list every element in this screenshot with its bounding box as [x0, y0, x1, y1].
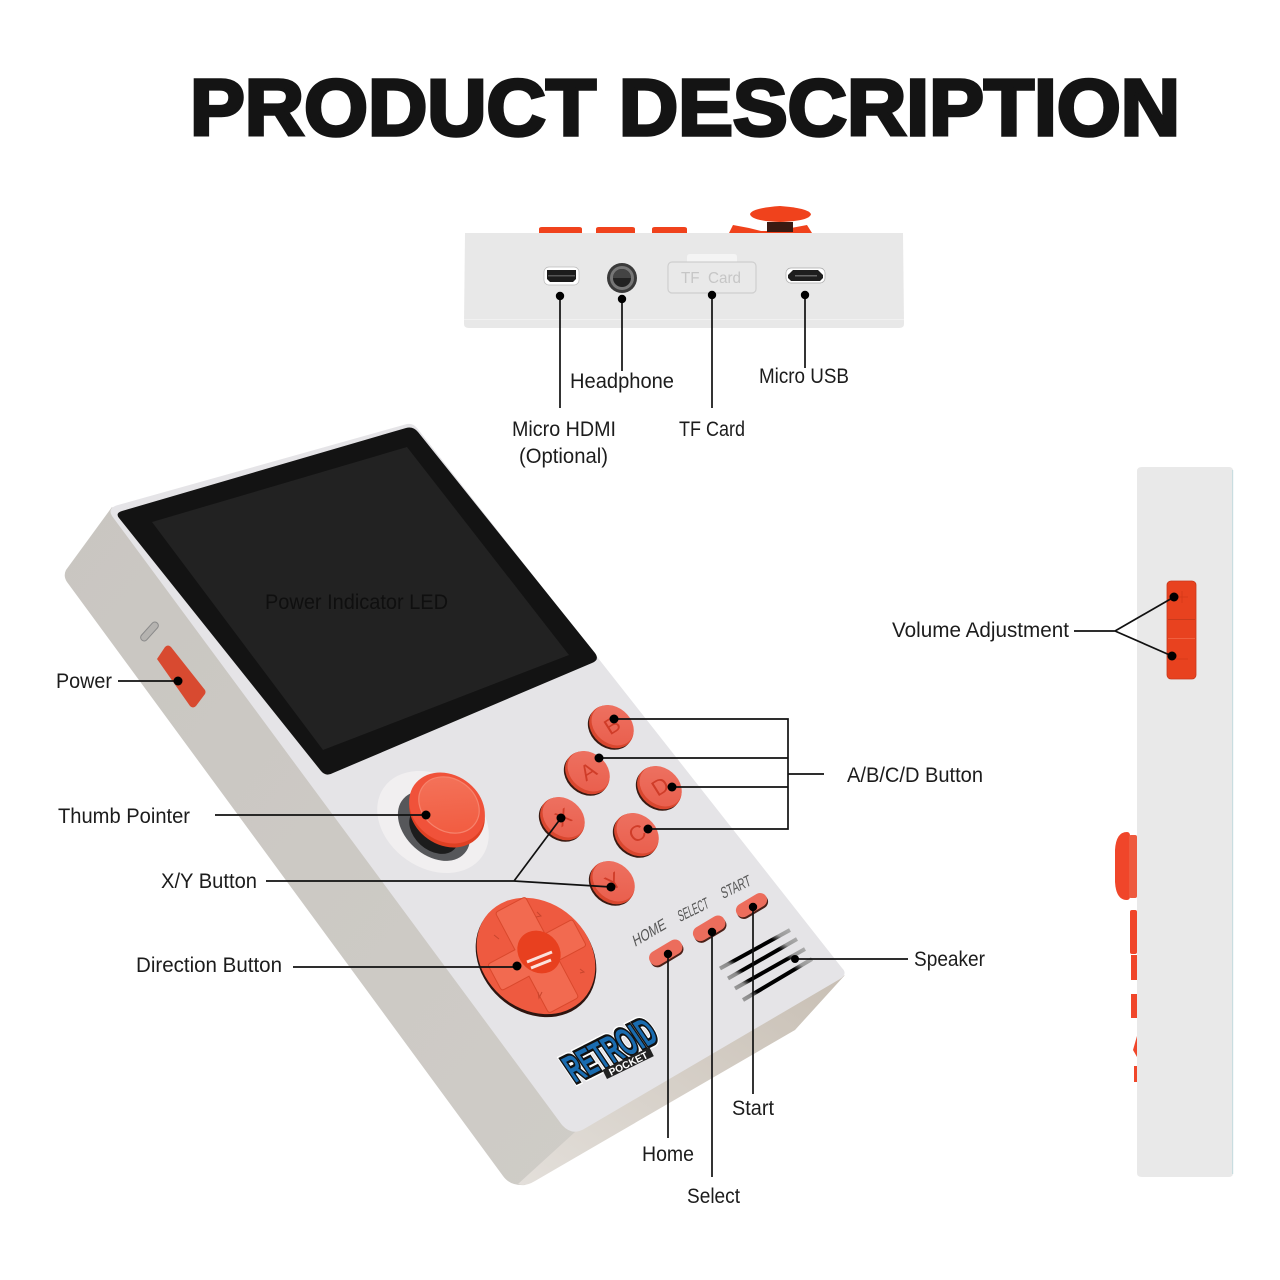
top view orange buttons	[539, 206, 812, 233]
volume button	[1167, 581, 1196, 679]
label: micro HDMI: (Optional)	[519, 445, 608, 468]
label: ABCD button: A/B/C/D Button	[847, 764, 983, 787]
button B	[579, 696, 643, 759]
label: direction button: Direction Button	[136, 954, 282, 977]
button C	[604, 804, 668, 867]
label: micro USB: Micro USB	[759, 365, 849, 388]
button B: B	[599, 711, 625, 740]
button Y	[580, 852, 644, 915]
direction pad	[452, 874, 620, 1042]
button A	[555, 742, 619, 805]
logo: Retroid Pocket: RETROID	[555, 1011, 665, 1090]
side view orange protrusions	[1115, 832, 1137, 1082]
callout: ABCD bracket	[594, 714, 824, 834]
lower right side face	[518, 975, 845, 1185]
title: PRODUCT DESCRIPTION	[190, 63, 1180, 152]
logo: Retroid Pocket: POCKET	[607, 1050, 651, 1079]
label: select: Select	[687, 1185, 740, 1208]
label: thumb pointer: Thumb Pointer	[58, 805, 190, 828]
screen text: Power Indicator LED	[265, 591, 448, 614]
home button	[646, 937, 686, 970]
port: headphone jack	[607, 263, 637, 293]
callout: X/Y leader	[266, 814, 616, 892]
button Y: Y	[600, 867, 626, 896]
panel: top view of console	[464, 206, 904, 328]
callout: top view leader lines	[556, 291, 809, 408]
port: micro HDMI	[544, 267, 579, 285]
top face	[110, 424, 845, 1132]
start button	[733, 890, 771, 922]
select button	[690, 913, 729, 945]
panel: main console	[65, 424, 845, 1185]
small button labels	[631, 872, 753, 951]
port: TF card cover: TF Card	[681, 270, 741, 287]
face buttons A B C D X Y	[530, 696, 691, 915]
label: headphone: Headphone	[570, 370, 674, 393]
label: TF card: TF Card	[679, 418, 745, 441]
button D	[627, 757, 691, 820]
port: TF card cover	[668, 254, 756, 293]
callout: thumb pointer leader	[215, 810, 430, 820]
small button labels: HOME	[631, 916, 668, 951]
screen	[152, 447, 569, 750]
left side face	[65, 507, 590, 1185]
logo: Retroid Pocket	[555, 1011, 665, 1090]
callout: power leader	[118, 676, 182, 686]
label: home: Home	[642, 1143, 694, 1166]
callout: direction leader	[293, 962, 522, 970]
power indicator LED	[139, 621, 160, 642]
callout: speaker leader	[791, 955, 908, 963]
button X	[530, 788, 594, 851]
small button labels: START	[719, 872, 753, 903]
thumb pointer	[357, 750, 509, 894]
speaker grille	[720, 930, 812, 1000]
panel: side view of console	[1115, 467, 1233, 1177]
button C: C	[624, 819, 651, 848]
logo: Retroid Pocket: RETROID	[555, 1011, 665, 1090]
button D: D	[647, 772, 674, 801]
label: speaker: Speaker	[914, 948, 985, 971]
label: micro HDMI: Micro HDMI	[512, 418, 616, 441]
small button labels: SELECT	[676, 895, 711, 926]
label: micro HDMI	[512, 418, 616, 468]
callout: home select start leaders	[664, 903, 757, 1177]
label: power: Power	[56, 670, 112, 693]
label: start: Start	[732, 1097, 774, 1120]
screen bezel	[118, 428, 597, 775]
label: volume adjustment: Volume Adjustment	[892, 619, 1069, 642]
button X: X	[550, 803, 576, 832]
button A: A	[575, 757, 601, 786]
top view body	[464, 233, 904, 328]
side view body	[1137, 467, 1233, 1177]
power button	[157, 646, 206, 708]
label: X/Y button: X/Y Button	[161, 870, 257, 893]
callout: volume leader	[1074, 592, 1178, 660]
port: micro USB	[786, 268, 825, 283]
logo: Retroid Pocket: RETROID	[555, 1011, 665, 1090]
